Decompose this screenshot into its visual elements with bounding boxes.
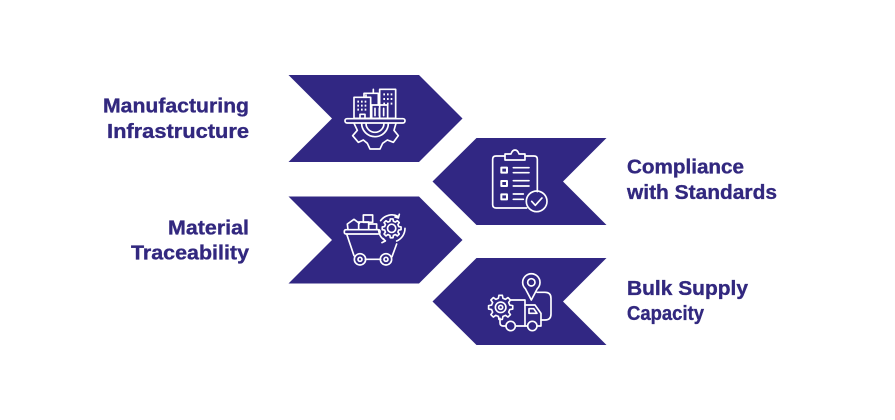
label: Material Traceability: Traceability — [131, 242, 250, 264]
chevron: material traceability — [288, 196, 462, 284]
label: Manufacturing Infrastructure: Infrastructure — [107, 121, 249, 143]
icon: mining cart with gear — [344, 214, 405, 265]
icon: delivery truck with gear and location pin — [489, 274, 551, 331]
label: Material Traceability — [131, 218, 250, 264]
icon: clipboard checklist — [493, 150, 547, 212]
label: Manufacturing Infrastructure — [103, 96, 249, 143]
label: Compliance with Standards — [626, 156, 777, 204]
label: Bulk Supply Capacity: Bulk Supply — [627, 278, 749, 300]
chevron: bulk supply capacity — [432, 258, 606, 345]
label: Manufacturing Infrastructure: Manufacturing — [103, 96, 249, 118]
label: Compliance with Standards: Compliance — [627, 156, 744, 178]
label: Bulk Supply Capacity: Capacity — [627, 303, 705, 325]
icon: factory buildings on gear — [345, 89, 405, 149]
chevron: compliance with standards — [432, 138, 606, 225]
label: Material Traceability: Material — [168, 218, 249, 240]
label: Compliance with Standards: with Standards — [626, 182, 777, 204]
chevron: manufacturing infrastructure — [288, 75, 462, 162]
label: Bulk Supply Capacity — [627, 278, 749, 325]
